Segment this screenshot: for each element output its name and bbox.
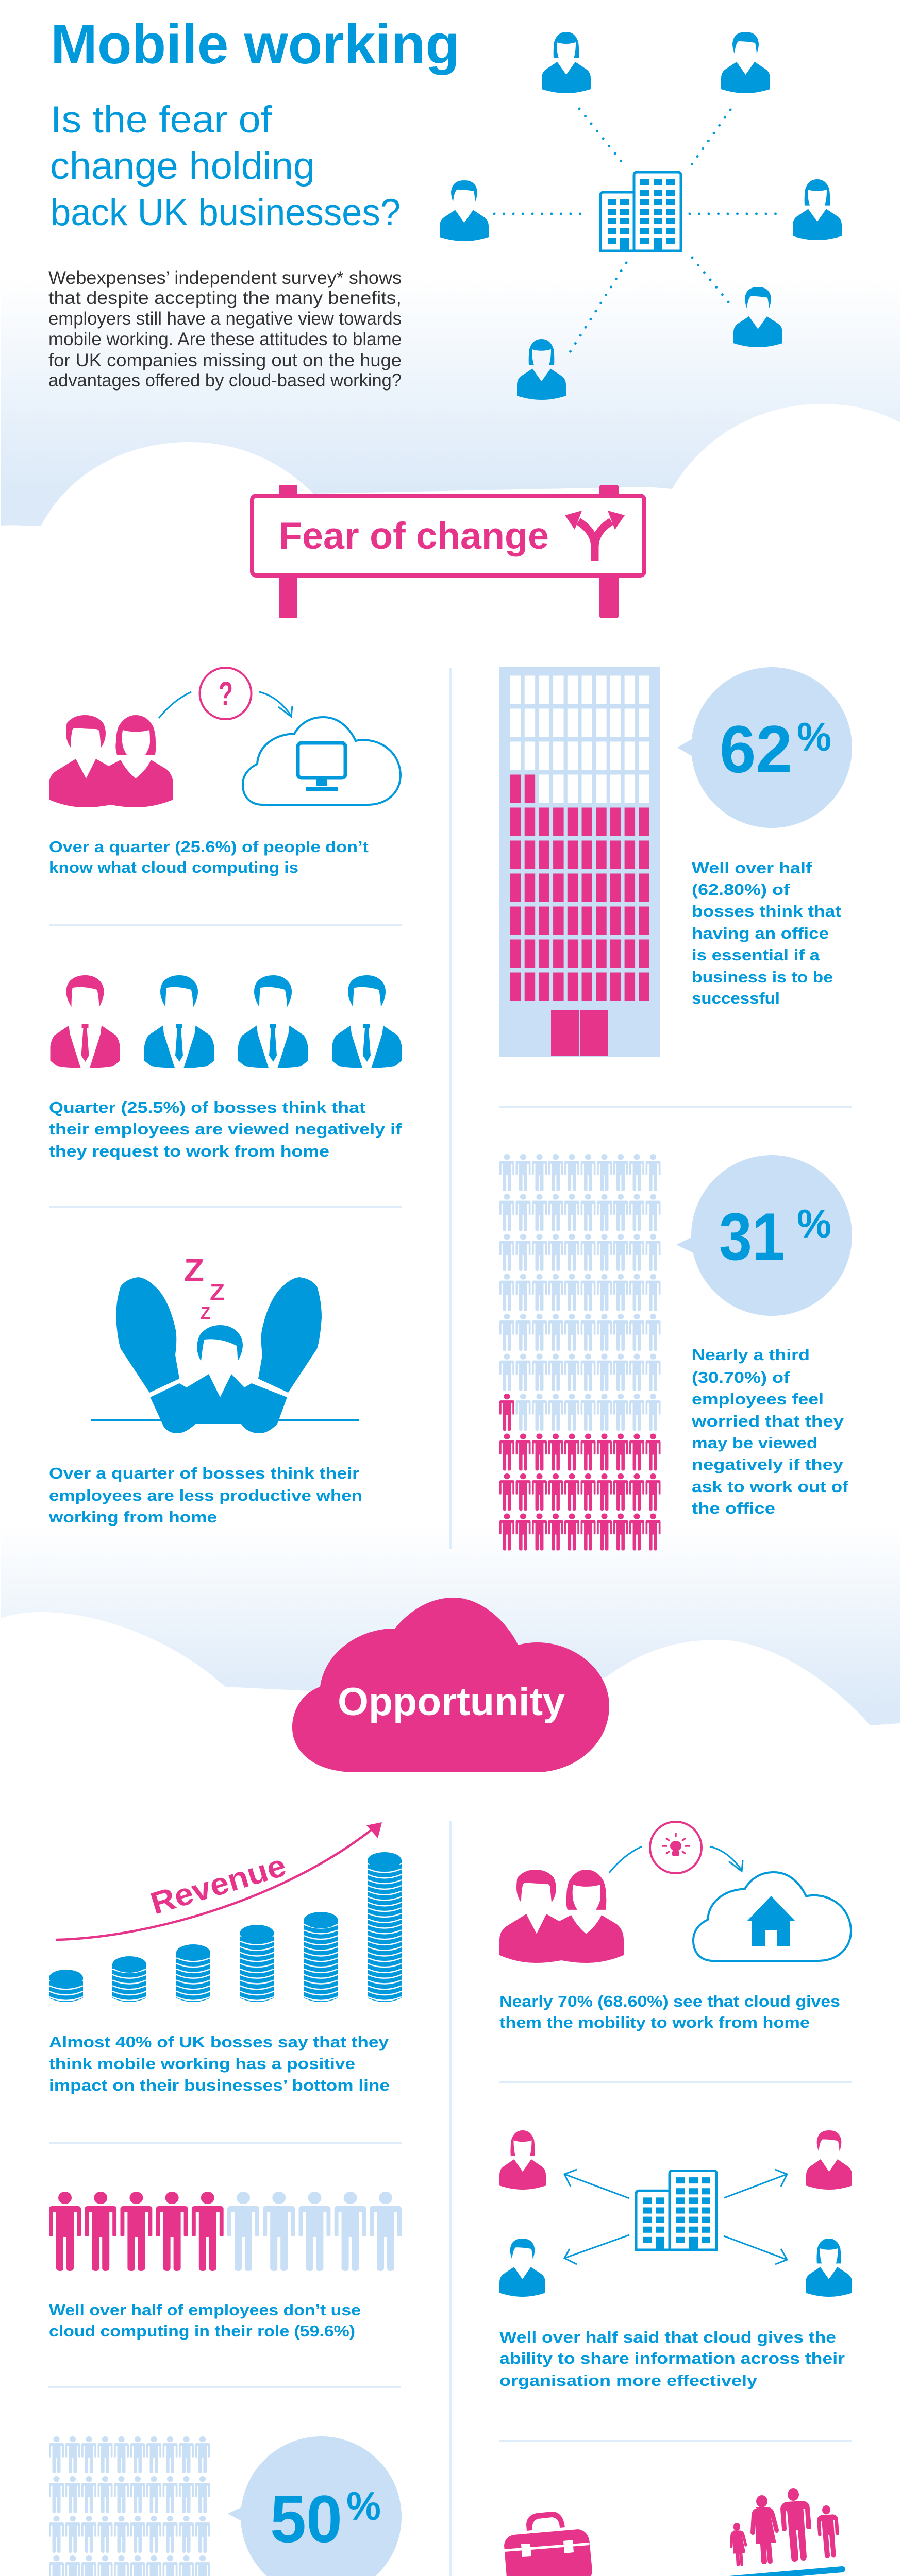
background: second sky gradient: [1, 1525, 900, 1752]
chart: ten people: [49, 2192, 402, 2271]
text: Over a quarter of bosses think their: [49, 1464, 359, 1482]
text: [49, 838, 369, 876]
intro paragraph: mobile working. Are these attitudes to blame: [48, 329, 402, 349]
intro paragraph: Webexpenses’ independent survey* shows: [48, 268, 402, 288]
callout: 62%: [677, 667, 852, 828]
text: their employees are viewed negatively if: [49, 1120, 402, 1138]
text: Well over half said that cloud gives the: [499, 2328, 836, 2346]
intro paragraph: that despite accepting the many benefits,: [48, 288, 402, 308]
chart: 100 people pictogram 31%: [499, 1154, 661, 1551]
text: (62.80%) of: [692, 880, 790, 899]
text: bosses think that: [692, 902, 841, 920]
callout: 50%: [228, 2436, 402, 2576]
text: they request to work from home: [49, 1142, 329, 1160]
callout: 62%: 62: [720, 711, 792, 787]
text: [499, 2328, 845, 2389]
text: negatively if they: [692, 1455, 844, 1473]
text: Well over half of employees don’t use: [49, 2301, 361, 2319]
title: Mobile working: [51, 13, 460, 76]
panel: bosses viewed negatively: [49, 975, 402, 1160]
panel: office essential: [499, 667, 852, 1057]
arrows: [159, 692, 292, 718]
icon: two people: [49, 715, 173, 807]
icon row: bosses: [51, 975, 402, 1068]
text: Over a quarter (25.6%) of people don’t: [49, 838, 369, 856]
text: organisation more effectively: [499, 2371, 758, 2389]
chart: coin stacks: [49, 1852, 402, 2002]
text: [49, 2033, 390, 2094]
text: [499, 1992, 840, 2031]
text: [48, 1464, 362, 1526]
seesaw beam: [509, 2569, 842, 2576]
text: [691, 1346, 849, 1517]
text: [692, 859, 841, 1007]
icon: zzz: Z: [184, 1252, 204, 1289]
column divider: opportunity: [449, 1821, 452, 2576]
icon: family: [730, 2488, 839, 2566]
staff icons: [440, 32, 842, 400]
callout: 31%: [676, 1155, 852, 1316]
icon: lightbulb: [650, 1822, 702, 1873]
text: worried that they: [691, 1412, 844, 1430]
callout: 31%: %: [797, 1201, 831, 1246]
icon: building: [636, 2171, 716, 2251]
panel: mobility: [499, 1822, 851, 2031]
subtitle: Is the fear of: [51, 99, 272, 141]
text: business is to be: [692, 968, 833, 986]
callout: 50%: 50: [270, 2481, 342, 2556]
dotted connectors: [494, 109, 782, 352]
arrows: [564, 2170, 787, 2264]
hero network diagram: [440, 32, 842, 400]
intro paragraph: advantages offered by cloud-based working?: [48, 370, 402, 391]
subtitle: back UK businesses?: [51, 192, 401, 233]
callout: 50%: %: [346, 2483, 381, 2529]
arrows: [609, 1846, 743, 1873]
text: employees are less productive when: [49, 1486, 362, 1504]
text: ability to share information across their: [499, 2349, 845, 2367]
intro paragraph: [48, 268, 402, 391]
icon: sleeping boss with feet up: [91, 1277, 359, 1433]
text: Well over half: [692, 859, 812, 877]
icon: question mark: [200, 668, 252, 719]
panel: work life balance: [499, 2488, 842, 2576]
panel: revenue: [49, 1822, 402, 2094]
text: Nearly 70% (68.60%) see that cloud gives: [499, 1992, 840, 2010]
chart: 100 people pictogram 50%: [49, 2436, 210, 2576]
text: employees feel: [692, 1390, 824, 1408]
text: [49, 2301, 361, 2340]
background: white clouds under second section: [1, 1612, 900, 1803]
callout: 62%: %: [797, 714, 831, 759]
panel: cloud use in role: [49, 2192, 402, 2340]
background: white clouds under top section: [0, 404, 901, 618]
text: know what cloud computing is: [49, 858, 298, 876]
icon: two people: [499, 1870, 624, 1963]
sign: fear of change: Fear of change: [279, 515, 549, 557]
icon: zzz: Z: [201, 1303, 210, 1323]
heading cloud: opportunity: [292, 1598, 609, 1772]
icon: zzz: Z: [210, 1279, 225, 1306]
icons: staff: [499, 2130, 852, 2297]
icon: cloud with monitor: [243, 717, 401, 805]
panel: employees worried: [499, 1154, 852, 1551]
text: them the mobility to work from home: [499, 2013, 810, 2031]
icon: zzz: [184, 1252, 225, 1323]
text: Nearly a third: [692, 1346, 810, 1364]
text: the office: [692, 1499, 775, 1517]
text: impact on their businesses’ bottom line: [49, 2076, 390, 2094]
panel: sharing information: [499, 2130, 852, 2389]
text: think mobile working has a positive: [49, 2055, 355, 2073]
icon: office building chart: [499, 667, 660, 1057]
panel: cloud awareness: [49, 668, 401, 876]
icon: fork arrow: [565, 511, 625, 561]
text: cloud computing in their role (59.6%): [49, 2322, 355, 2340]
intro paragraph: for UK companies missing out on the huge: [48, 350, 402, 370]
intro paragraph: employers still have a negative view towards: [48, 309, 402, 329]
background: top sky gradient: [1, 0, 900, 526]
text: working from home: [48, 1508, 217, 1526]
icon: briefcase: [504, 2512, 592, 2576]
icon: cloud with house: [693, 1872, 851, 1961]
subtitle: change holding: [50, 145, 315, 187]
subtitle: [50, 99, 401, 233]
label: revenue: Revenue: [146, 1848, 290, 1921]
text: (30.70%) of: [692, 1368, 790, 1386]
text: is essential if a: [692, 946, 820, 964]
text: successful: [692, 989, 780, 1007]
text: Almost 40% of UK bosses say that they: [49, 2033, 389, 2051]
callout: 31%: 31: [719, 1199, 785, 1274]
icon: question mark: ?: [219, 674, 233, 713]
building: [600, 172, 681, 252]
panel: less productive: [48, 1252, 362, 1526]
heading cloud: opportunity: Opportunity: [338, 1680, 565, 1724]
arrow: revenue growth: [57, 1822, 382, 1940]
column divider: fear of change: [449, 668, 452, 1549]
panel: work out of office: [49, 2436, 402, 2576]
text: having an office: [692, 924, 829, 942]
sign: fear of change: [252, 485, 644, 618]
text: [49, 1098, 402, 1160]
text: may be viewed: [692, 1434, 817, 1452]
text: Quarter (25.5%) of bosses think that: [49, 1098, 365, 1116]
text: ask to work out of: [692, 1478, 849, 1496]
